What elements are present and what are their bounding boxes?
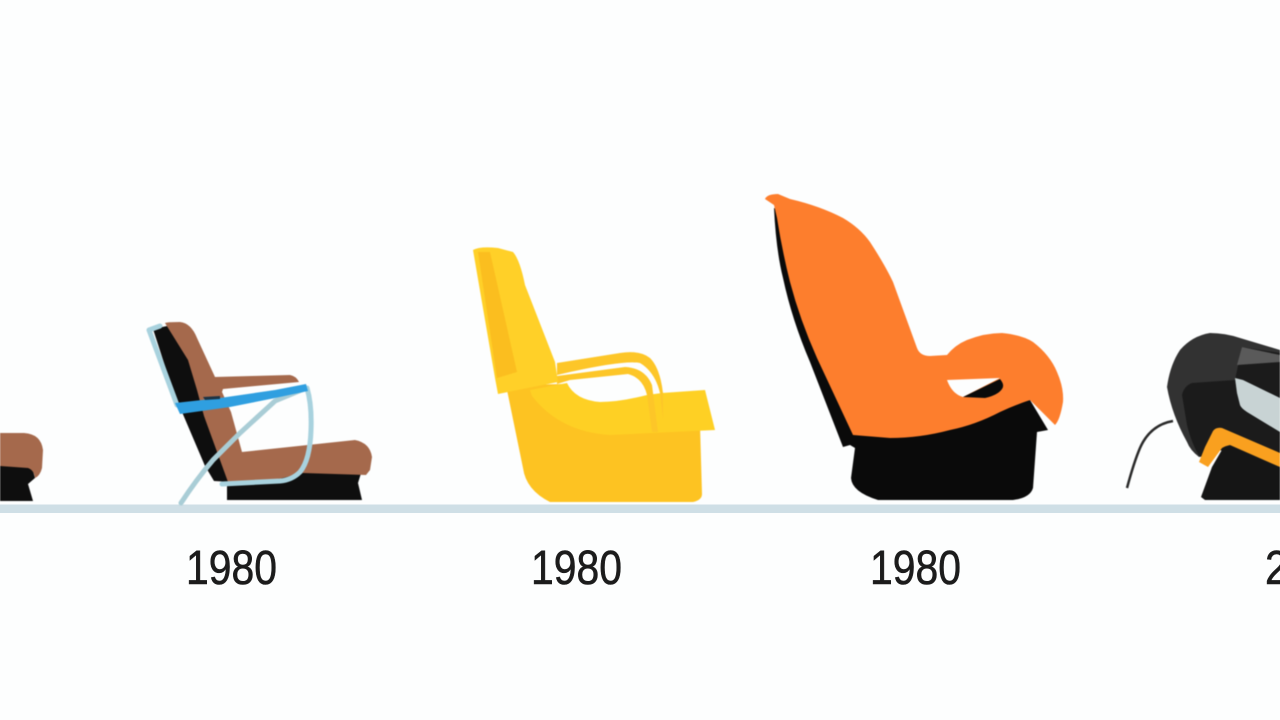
- year label: 1980: [870, 542, 961, 595]
- year label: 1980: [186, 542, 277, 595]
- chair 2: brown chair with blue frame: [149, 322, 372, 503]
- chair 5: cropped black seat at right edge: [1127, 333, 1280, 500]
- chair 4: orange chair: [765, 194, 1063, 500]
- blue strap: [175, 384, 308, 414]
- chair 1: cropped brown seat at left edge: [0, 433, 43, 501]
- arm opening: [947, 378, 1000, 397]
- steel frame: [149, 326, 311, 484]
- timeline line: [0, 504, 1280, 513]
- cable: [1127, 421, 1173, 488]
- chair 3: yellow chair: [473, 247, 715, 502]
- year label: 1980: [531, 542, 622, 595]
